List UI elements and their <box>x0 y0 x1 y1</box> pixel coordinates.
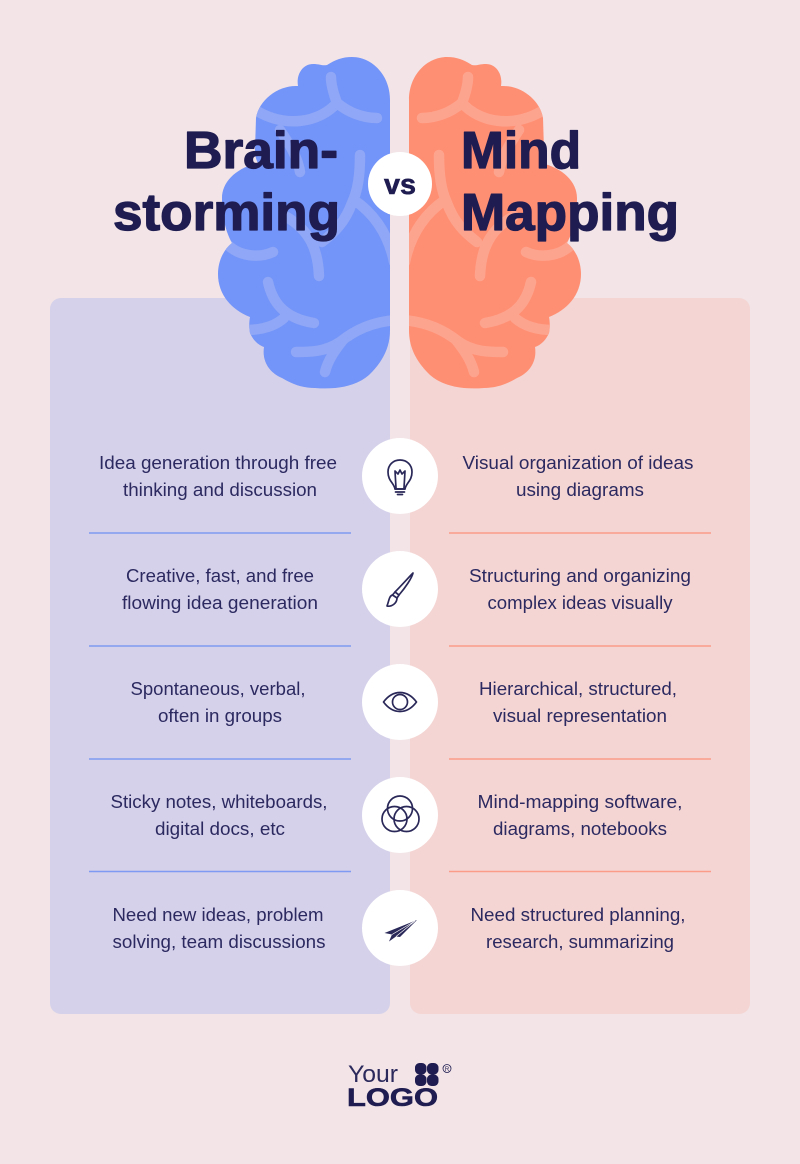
title: Brainstorming: Brain- <box>184 122 338 180</box>
text: row 5 left: Need new ideas, problem <box>112 905 324 925</box>
text: row 1 right: using diagrams <box>516 480 644 500</box>
text: row 3 left <box>130 679 306 726</box>
logo: Your <box>348 1061 398 1088</box>
icon: eye <box>362 664 438 740</box>
text: row 1 right <box>462 453 694 500</box>
text: row 2 left <box>122 566 318 613</box>
text: row 3 right: Hierarchical, structured, <box>479 679 677 699</box>
text: row 5 right: Need structured planning, <box>470 905 686 925</box>
vs badge <box>368 152 432 216</box>
title: Mind Mapping <box>461 122 679 242</box>
text: row 2 left: flowing idea generation <box>122 593 318 613</box>
logo: R <box>445 1067 450 1073</box>
text: row 4 left: Sticky notes, whiteboards, <box>110 792 328 812</box>
title: Brainstorming <box>113 122 340 242</box>
icon: paper plane <box>362 890 438 966</box>
text: row 3 left: often in groups <box>158 706 282 726</box>
text: row 5 right: research, summarizing <box>486 932 674 952</box>
text: row 1 right: Visual organization of ideas <box>462 453 694 473</box>
text: row 2 right <box>469 566 691 613</box>
text: row 1 left: thinking and discussion <box>123 480 317 500</box>
row dividers <box>89 533 711 872</box>
text: row 1 left: Idea generation through free <box>99 453 337 473</box>
text: row 4 right <box>478 792 682 839</box>
text: row 4 left <box>110 792 328 839</box>
text: row 4 right: Mind-mapping software, <box>478 792 682 812</box>
logo <box>347 1061 451 1112</box>
text: row 5 left: solving, team discussions <box>112 932 326 952</box>
title: Mind Mapping: Mapping <box>461 184 679 242</box>
text: row 3 right <box>479 679 677 726</box>
text: row 2 left: Creative, fast, and free <box>126 566 314 586</box>
text: row 2 right: complex ideas visually <box>488 593 672 613</box>
icon: coral right brain hemisphere <box>403 57 581 388</box>
icon: overlapping circles <box>362 777 438 853</box>
vs badge: vs <box>384 169 416 201</box>
text: row 3 right: visual representation <box>493 706 667 726</box>
text: row 2 right: Structuring and organizing <box>469 566 691 586</box>
text: row 4 left: digital docs, etc <box>155 819 285 839</box>
text: row 1 left <box>99 453 337 500</box>
title: Mind Mapping: Mind <box>461 122 581 180</box>
text: row 5 right <box>470 905 686 952</box>
icon: light bulb <box>362 438 438 514</box>
title: Brainstorming: storming <box>113 184 340 242</box>
text: row 5 left <box>112 905 326 952</box>
icon: paint brush <box>362 551 438 627</box>
logo: LOGO <box>347 1084 438 1112</box>
panel: mind mapping <box>410 298 750 1014</box>
icon: blue left brain hemisphere <box>218 57 396 388</box>
panel: brainstorming <box>50 298 390 1014</box>
text: row 4 right: diagrams, notebooks <box>493 819 667 839</box>
text: row 3 left: Spontaneous, verbal, <box>130 679 306 699</box>
